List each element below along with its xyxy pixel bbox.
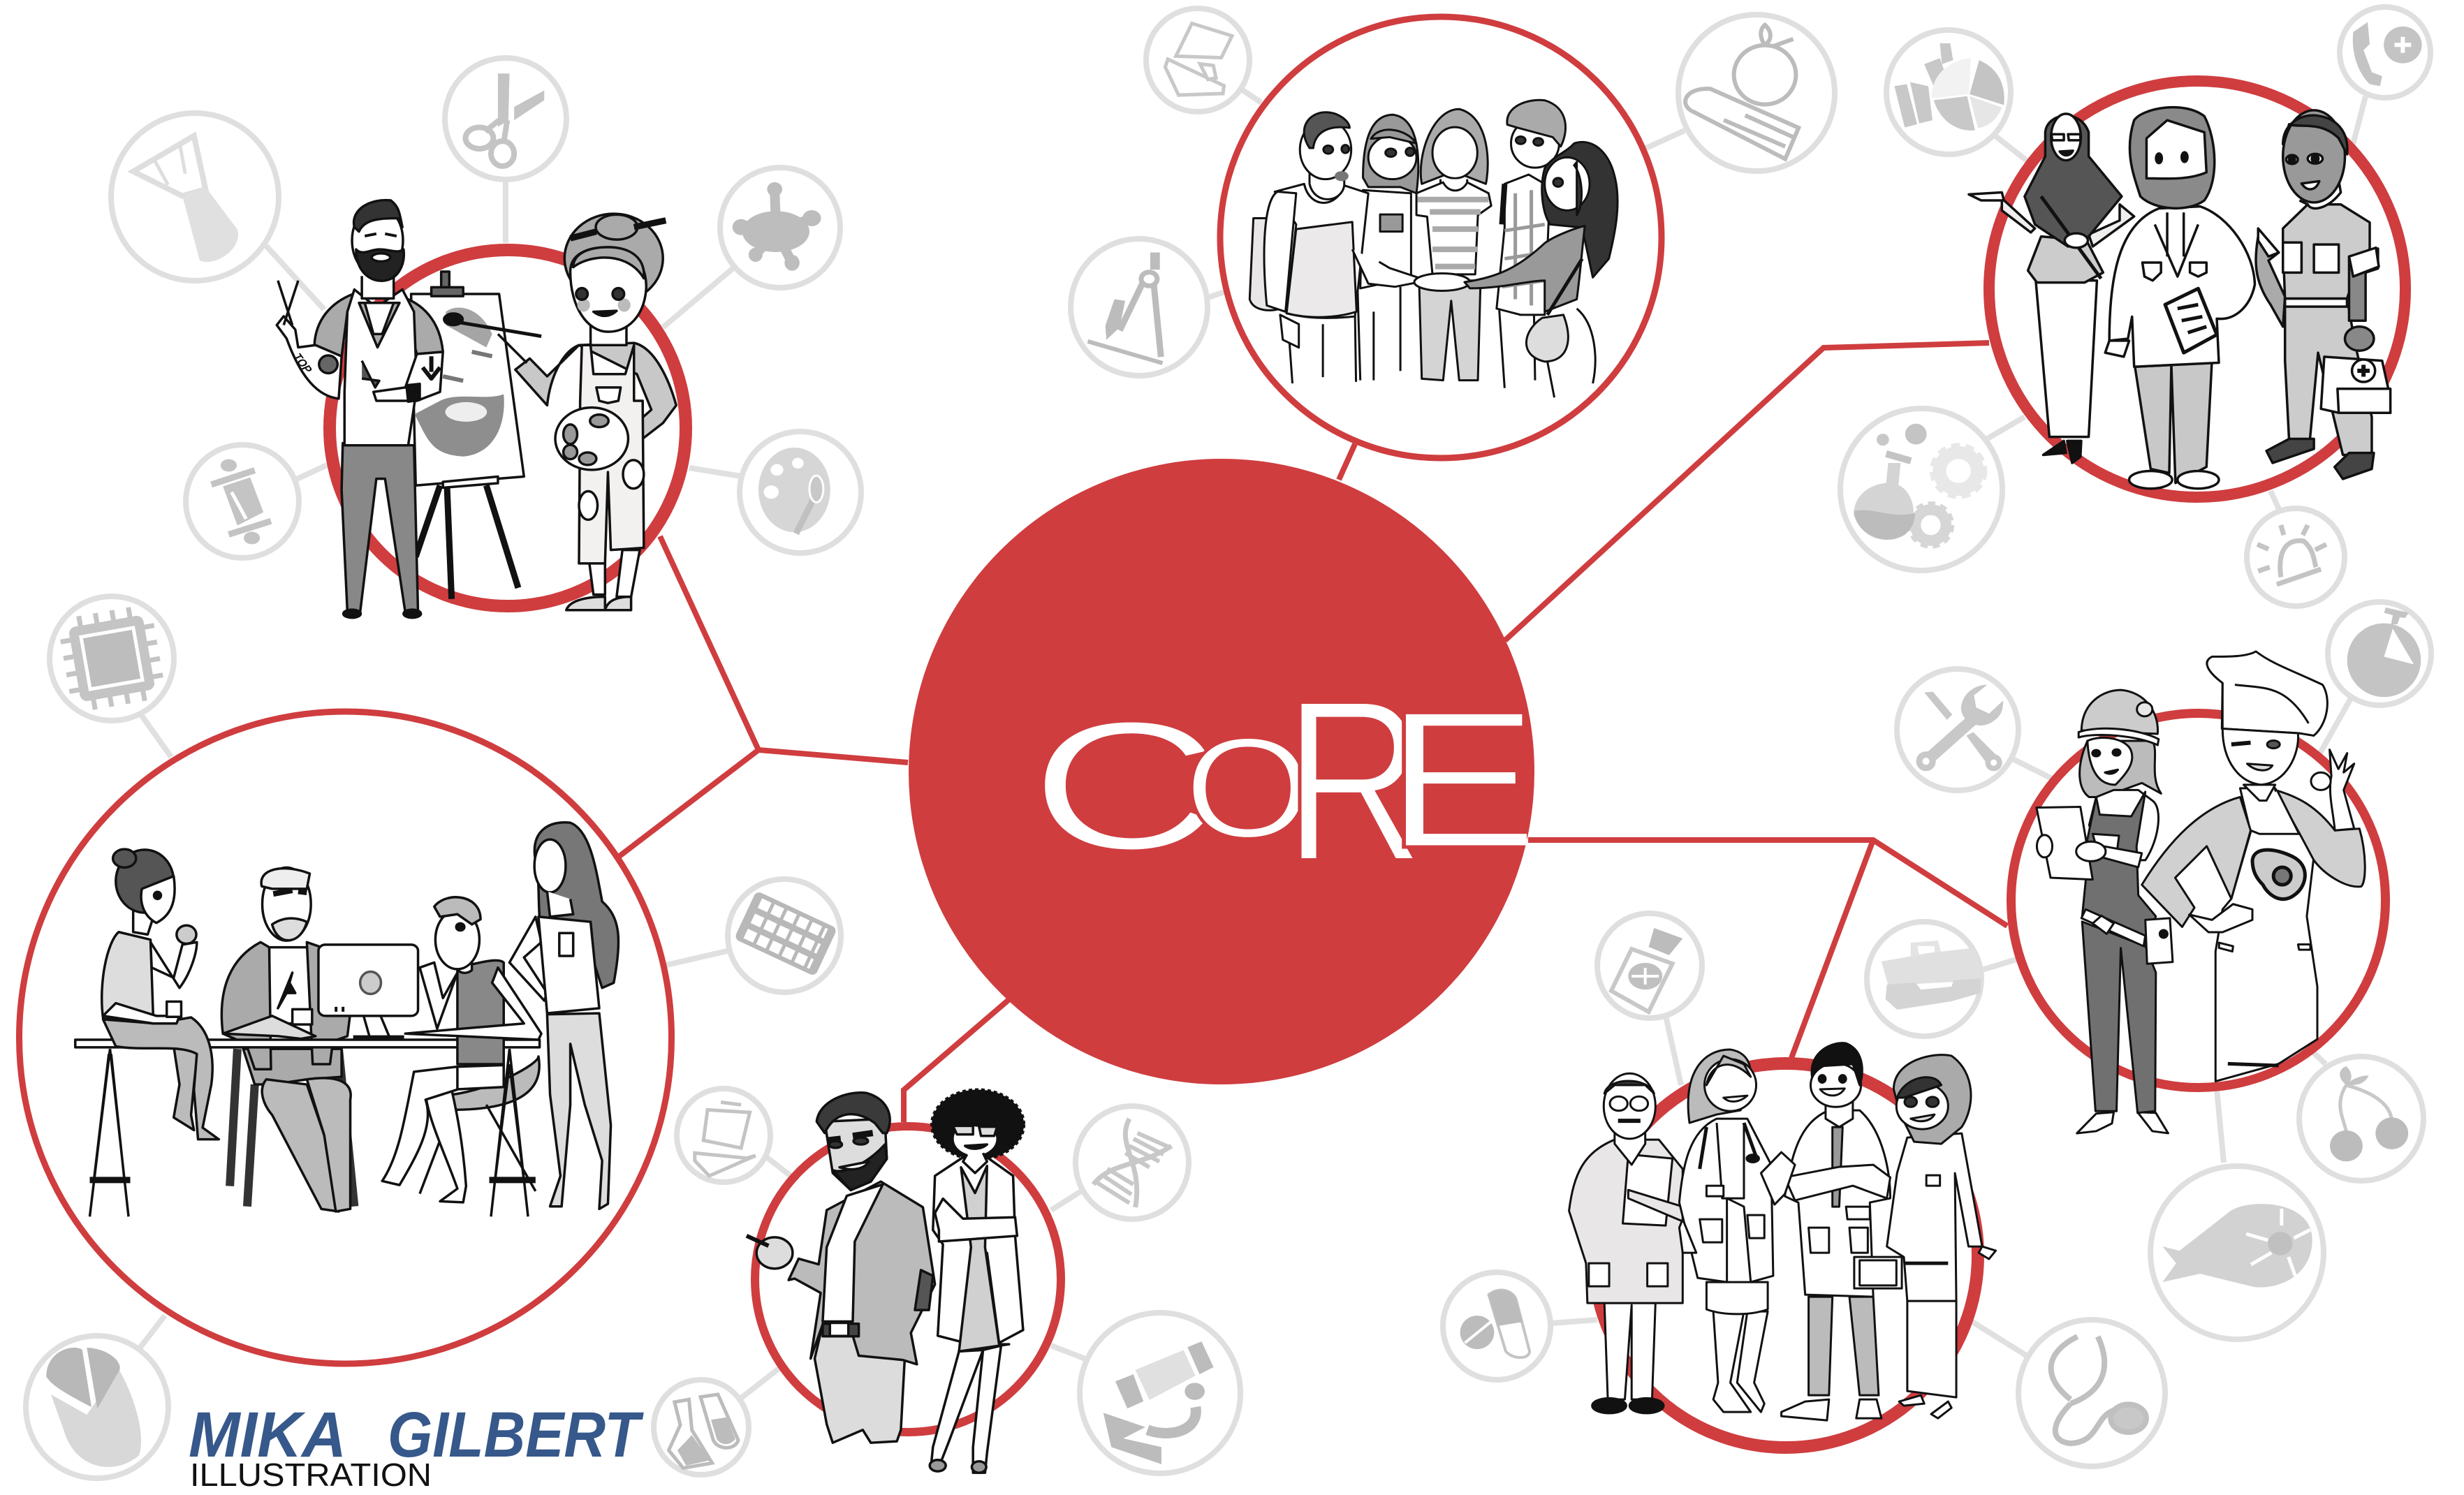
title: CORE: R	[1284, 651, 1425, 909]
grey connectors	[1552, 1016, 2026, 1355]
bearded man	[221, 867, 351, 1212]
icon: flask with gears	[1840, 408, 2002, 570]
chair and stool	[230, 1049, 539, 1207]
icon: DNA helix	[1076, 1106, 1189, 1219]
easel with portrait	[411, 272, 524, 599]
ring: artists	[330, 250, 686, 606]
woman in headscarf	[1854, 1055, 1996, 1418]
icon: palette	[740, 432, 861, 553]
panel: business and science	[654, 1089, 1240, 1475]
stacked hands	[1414, 273, 1470, 290]
title: CORE: C	[1029, 683, 1219, 888]
bearded doctor	[2105, 108, 2254, 489]
third student	[1416, 109, 1491, 381]
ring: worker and chef	[2011, 714, 2386, 1088]
figures: medical staff	[1569, 1043, 1996, 1420]
icon: charts	[1886, 30, 2011, 154]
icon: microscope	[1080, 1313, 1240, 1473]
second student	[1358, 115, 1418, 381]
first student	[1249, 112, 1427, 383]
ring: business and science	[755, 1126, 1061, 1432]
panel: teacher, doctor and paramedic	[1840, 7, 2430, 606]
icon: ham	[2150, 1166, 2324, 1339]
figures: barber, easel and painter	[277, 200, 676, 618]
grey connectors	[1986, 96, 2366, 509]
title: CORE: O	[1184, 707, 1312, 867]
grey connectors	[740, 1156, 1085, 1399]
figures: five students	[1249, 100, 1618, 397]
older doctor	[1569, 1073, 1682, 1413]
panel: office team	[20, 596, 841, 1478]
icon: stethoscope	[2018, 1320, 2165, 1466]
panel: students	[1071, 8, 1835, 458]
logo: Mika Gilbert Illustration	[189, 1399, 644, 1493]
ring: medical staff	[1594, 1063, 1978, 1448]
icon: toolbox	[1867, 922, 1981, 1036]
ring: office team	[20, 712, 672, 1364]
grey connectors	[1208, 90, 1685, 297]
chef	[2142, 651, 2365, 1082]
icon: drawing compass	[1071, 239, 1208, 376]
title: CORE: E	[1385, 670, 1539, 888]
grey connectors	[266, 180, 741, 479]
scientist	[930, 1090, 1024, 1473]
logo: Mika Gilbert Illustration: ILLUSTRATION	[190, 1457, 432, 1493]
icon: microchip	[50, 596, 174, 721]
icon: cherries	[2299, 1056, 2423, 1181]
logo: Mika Gilbert Illustration: MIKA	[189, 1399, 346, 1471]
figures: businessman and scientist	[747, 1090, 1024, 1473]
ring: students	[1220, 17, 1662, 458]
icon: shaving brush	[111, 113, 279, 281]
logo: Mika Gilbert Illustration: GILBERT	[388, 1399, 644, 1471]
icon: flask and test tube	[654, 1380, 749, 1475]
grey connectors	[139, 716, 727, 1349]
construction worker	[2037, 690, 2173, 1133]
panel: medical staff	[1443, 913, 2165, 1466]
red connector lines	[619, 343, 2007, 1122]
ring: teacher, doctor and paramedic	[1989, 81, 2405, 497]
icon: stopwatch	[2328, 602, 2431, 705]
panel: artists	[111, 58, 861, 618]
barber: TOP	[290, 352, 315, 375]
icon: emergency phone	[2340, 7, 2430, 98]
icon: siren	[2247, 508, 2345, 606]
figures: worker and chef	[2037, 651, 2365, 1133]
icon: document scanner top	[1146, 8, 1249, 112]
paramedic	[2256, 110, 2391, 479]
icon: medicine bottle	[1597, 913, 1702, 1018]
painter	[444, 214, 676, 610]
icon: tools	[1897, 669, 2018, 790]
icon: paint splat	[720, 168, 840, 288]
teacher	[1969, 114, 2134, 463]
woman doctor	[1679, 1050, 1773, 1412]
businessman	[747, 1093, 935, 1443]
panel: worker and chef	[1867, 602, 2431, 1339]
icon: document scanner	[677, 1089, 770, 1182]
computer monitor	[318, 945, 418, 1038]
icon: apple on book	[1678, 15, 1835, 171]
icon: computer mouse	[26, 1336, 168, 1478]
main red circle	[909, 459, 1534, 1084]
title: CORE	[1045, 704, 1529, 858]
grey connectors	[1982, 698, 2351, 1163]
woman with dark hair	[1465, 142, 1618, 397]
icon: barber pole	[186, 445, 299, 558]
woman at computer	[382, 897, 541, 1202]
icon: scissors	[445, 58, 566, 179]
icon: pills	[1443, 1272, 1550, 1380]
barber	[277, 200, 443, 618]
table with trestles	[75, 1040, 540, 1216]
standing woman	[510, 823, 619, 1209]
icon: keyboard	[728, 879, 841, 992]
figures: office team	[75, 823, 619, 1216]
figures: teacher, doctor and paramedic	[1969, 108, 2391, 489]
woman sitting on table	[102, 849, 219, 1140]
male doctor	[1761, 1043, 1891, 1420]
fourth student	[1497, 100, 1566, 388]
